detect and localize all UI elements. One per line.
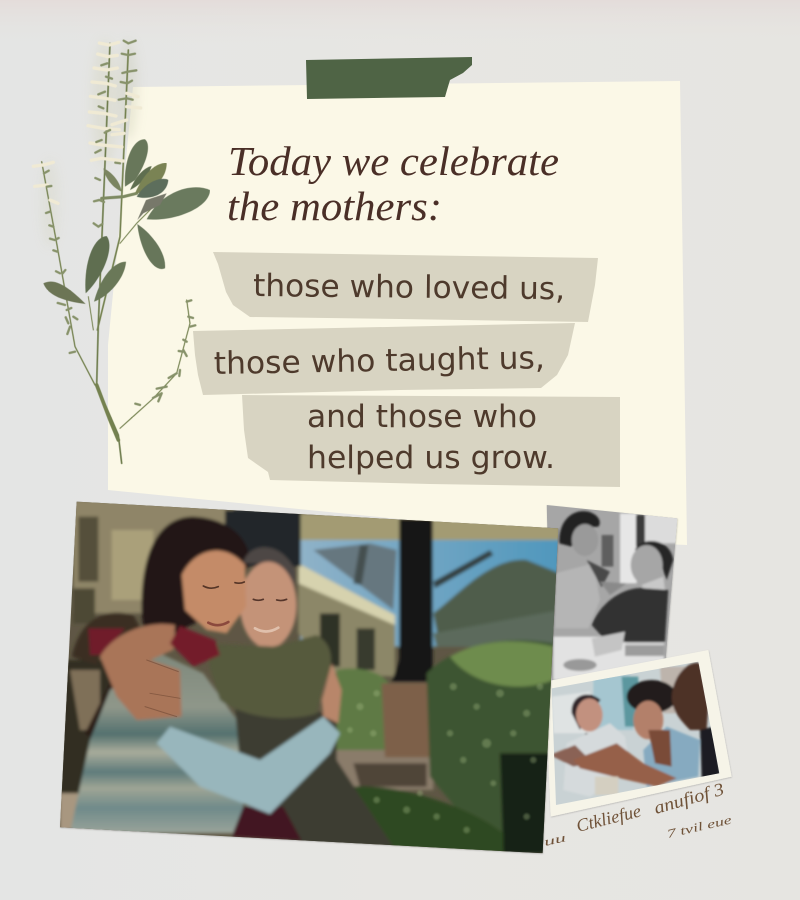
cream florets: [33, 42, 141, 203]
green florets: [44, 41, 195, 405]
panel: cream paper sheet: [108, 81, 687, 545]
photo: family laughing: [552, 662, 720, 805]
panel: polaroid frame: [545, 650, 732, 817]
facial features: [203, 582, 287, 631]
man face: [631, 545, 663, 585]
lines: and those who helped us grow: and those who: [307, 399, 537, 435]
handwriting script: [543, 779, 734, 849]
photo: black and white mother and son: [546, 505, 678, 680]
man head: [672, 663, 708, 730]
blue sleeve: [157, 717, 340, 814]
wall: [593, 675, 633, 730]
woman shirt: [563, 723, 630, 797]
woman dress: [555, 563, 600, 628]
title: Today we celebrate: [228, 138, 559, 184]
foliage speckle: [347, 683, 543, 833]
ground: [330, 748, 433, 790]
mother face: [240, 562, 297, 648]
woman hair: [559, 511, 600, 547]
woman hair: [572, 695, 601, 730]
pressed flower sprig: [33, 40, 210, 463]
title: the mothers:: [227, 183, 442, 229]
leaves: [43, 139, 210, 304]
woman face: [576, 698, 603, 732]
bare tree branches: [313, 543, 397, 610]
torn paper strip: taught: [193, 323, 575, 395]
woman hands: [554, 744, 586, 768]
woman face: [572, 524, 598, 556]
middle bush: [335, 669, 390, 750]
flower spike haze: [41, 40, 138, 247]
green jacket sleeve: [207, 635, 331, 718]
left lower interior: [62, 658, 111, 794]
hands and arms: [573, 743, 677, 787]
daughter face: [182, 551, 246, 633]
maroon shirt: [232, 807, 302, 841]
porch wall and ceiling: [73, 500, 233, 613]
sweater: [70, 653, 247, 833]
handwriting script: anufiof 3: [652, 779, 726, 818]
hand on back: [322, 663, 342, 723]
maroon cuff: [170, 626, 220, 667]
daughter hair: [142, 517, 250, 633]
right bush: [427, 640, 553, 853]
man polo: [592, 588, 668, 642]
green washi tape: [306, 57, 472, 99]
house side: [296, 583, 398, 680]
boy hair: [627, 680, 677, 713]
fingers: [145, 660, 180, 717]
title: [227, 138, 559, 229]
brick base: [382, 683, 432, 757]
table: [553, 637, 664, 680]
lower bush: [353, 786, 503, 853]
boy shirt: [643, 727, 700, 787]
man hair: [635, 541, 673, 580]
boy face: [633, 701, 663, 739]
sky: [300, 540, 560, 647]
man shirt: [700, 727, 721, 778]
torn paper strip: loved: [213, 252, 598, 322]
photo: mother and daughter hugging: [60, 500, 560, 857]
lines: and those who helped us grow: helped us grow.: [307, 440, 555, 476]
lower jacket: [235, 707, 393, 847]
trees: [431, 558, 556, 635]
torn paper strip: grow: [242, 395, 620, 487]
line: those who taught us: those who taught us,: [214, 340, 545, 382]
arm: [600, 582, 627, 595]
left dark sleeve: [72, 613, 143, 665]
dark column center: [225, 510, 301, 567]
lines: and those who helped us grow: [307, 399, 555, 476]
handwriting script: Ctkliefue: [574, 801, 643, 836]
stems: [42, 43, 190, 463]
handwriting script: 7 tvil eue: [666, 812, 734, 841]
room wall and window: [620, 513, 637, 583]
glass: [595, 777, 618, 795]
mother hair: [242, 546, 295, 581]
line: those who loved us: those who loved us,: [253, 268, 565, 307]
handwriting script: uu: [543, 830, 567, 849]
black column right: [392, 518, 433, 682]
forearm hand: [100, 624, 182, 720]
man neck: [641, 576, 666, 592]
